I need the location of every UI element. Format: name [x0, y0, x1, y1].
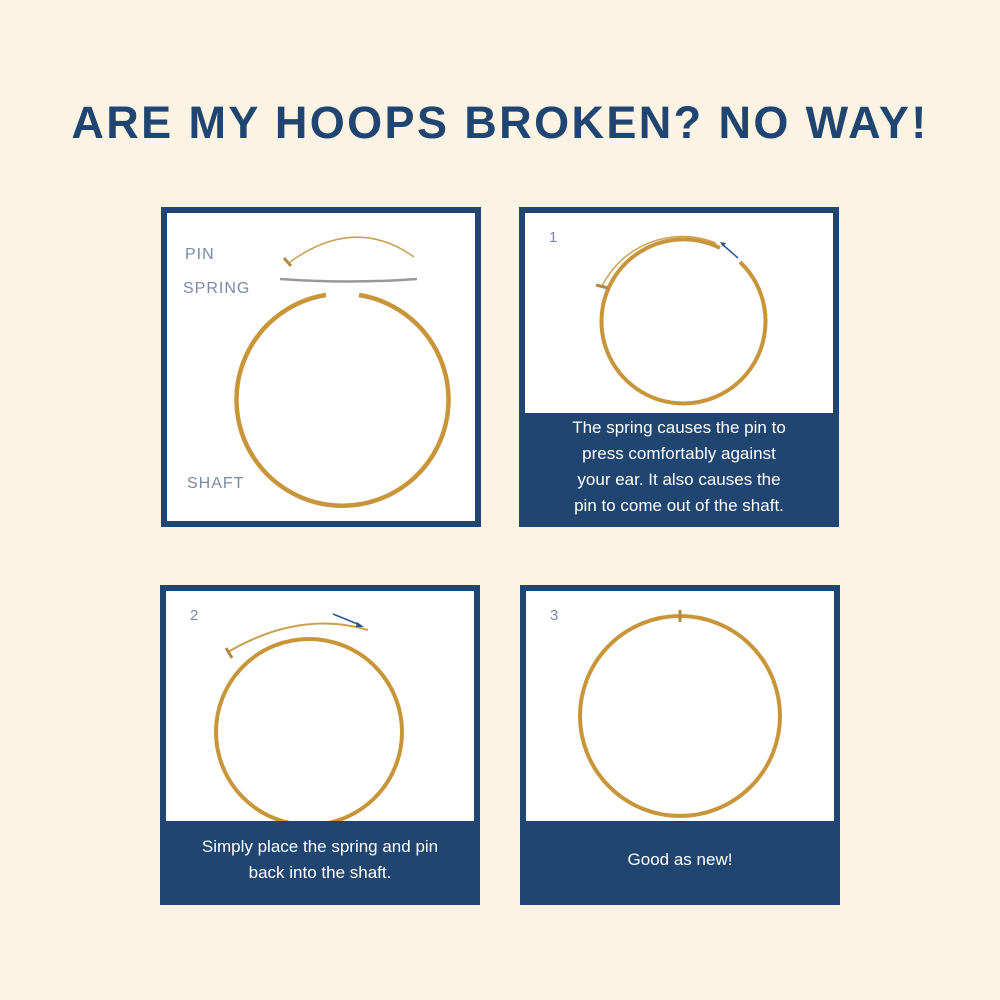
caption — [166, 821, 474, 899]
hoop with pin reinsertion — [214, 613, 404, 821]
caption — [526, 821, 834, 899]
panel: step 3: 3 — [550, 607, 558, 624]
panel: step 1: 1 — [549, 229, 557, 246]
caption — [525, 413, 833, 521]
caption: Simply place the spring and pin — [202, 837, 438, 856]
parts illustration — [234, 236, 451, 508]
panel: step 2: 2 — [190, 607, 198, 624]
panel: step 3 — [520, 585, 840, 905]
caption: pin to come out of the shaft. — [574, 496, 784, 515]
caption: back into the shaft. — [249, 863, 391, 882]
label: spring: SPRING — [183, 280, 250, 297]
label: pin: PIN — [185, 246, 215, 263]
caption: The spring causes the pin to — [572, 418, 786, 437]
label: shaft: SHAFT — [187, 475, 244, 492]
panel: step 1 — [519, 207, 839, 527]
caption: press comfortably against — [582, 444, 776, 463]
hoop with pin out — [596, 236, 768, 406]
complete hoop — [578, 610, 782, 818]
caption: your ear. It also causes the — [577, 470, 781, 489]
caption: Good as new! — [628, 850, 732, 869]
title: ARE MY HOOPS BROKEN? NO WAY! — [71, 97, 929, 148]
panel: parts — [161, 207, 481, 527]
panel: step 2 — [160, 585, 480, 905]
